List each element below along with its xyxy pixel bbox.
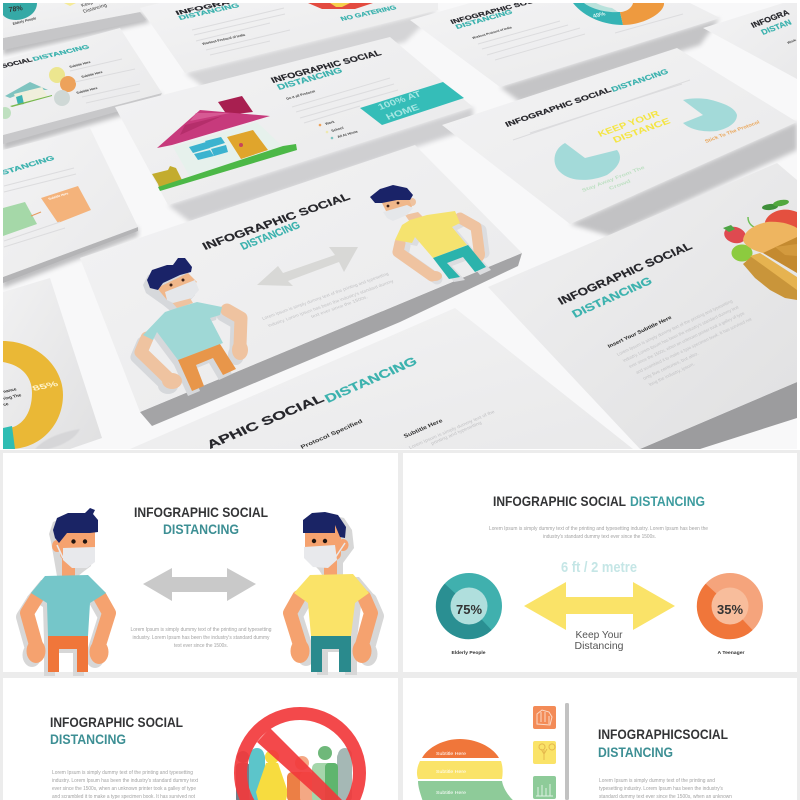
slide: protocol specified: Lorem Ipsum is simply dummy text of the: [408, 409, 496, 451]
title: INFOGRAPHIC SOCIAL: [493, 493, 626, 509]
slide: donut 49%: 49%: [592, 11, 608, 20]
layered bubble: Subtitle Here: [436, 769, 467, 774]
body text: [489, 526, 708, 540]
title: DISTANCING: [163, 521, 239, 537]
slide shadows: [3, 10, 797, 449]
slide: flow boxes: Subtitle Here: [48, 192, 69, 201]
slide: keep your distance: Stay Away From The: [581, 165, 646, 194]
slide: title with fruit basket: Lorem Ipsum is simply dummy text of the printing and typesetting: [616, 299, 734, 358]
slide: protocol specified: APHIC SOCIAL: [204, 392, 327, 451]
body text: and scrambled it to make a type specimen book. It has survived not: [52, 794, 196, 800]
distance label: 6 ft / 2 metre: [561, 559, 637, 576]
slide: house with 100% at home: INFOGRAPHIC SOCIAL: [269, 48, 383, 85]
slide: keep your distance: INFOGRAPHIC SOCIAL: [504, 85, 613, 129]
body text: Lorem Ipsum is simply dummy text of the printing and typesetting: [52, 770, 193, 776]
slide: title and no gathering: INFOGRA: [175, 0, 232, 17]
slide: house with 100% at home: DISTANCING: [275, 65, 344, 92]
donut labels: A Teenager: [718, 650, 745, 655]
keep your distance heading: KEEP YOUR: [596, 109, 661, 139]
body text: Lorem Ipsum is simply dummy text of the printing and: [599, 778, 715, 784]
title: [50, 718, 183, 744]
layered bubble: Subtitle Here: [436, 751, 467, 756]
body text: [52, 770, 199, 800]
donut 75%: 75%: [456, 602, 482, 617]
slide: top right corner: INFOGRA: [750, 8, 791, 30]
keep your distance heading: DISTANCE: [611, 116, 672, 145]
slide: two masked men: INFOGRAPHIC SOCIAL: [201, 191, 353, 252]
slide: donut 49%: INFOGRAPHIC SOC: [450, 0, 535, 26]
slide: keep your distance: Crowd: [608, 179, 632, 192]
bullets: [319, 120, 359, 139]
slide: flow boxes: [0, 128, 138, 277]
slide: small house with steps: [0, 28, 162, 135]
slide: two masked men: DISTANCING: [239, 220, 303, 252]
slide: title and no gathering: NO GATERING: [340, 5, 398, 23]
donut labels: [452, 650, 745, 655]
body text: ever since the 1500s, when an unknown printer took a galley of type: [52, 786, 196, 792]
slide: protocol specified: Subtitle Here: [403, 418, 445, 440]
slide: donut 85%: ce: [2, 401, 10, 407]
title: DISTANCING: [50, 731, 126, 747]
slide: top right corner: [703, 3, 797, 79]
slide: title with fruit basket: ever since the 1500s, when an unknown printer took a galley of type: [628, 311, 746, 370]
slide: top-left 78%: Keep: [80, 0, 95, 9]
slide: top-left 78%: 78%: [8, 5, 24, 14]
layered bubble: [417, 739, 515, 800]
keep your distance heading: [598, 111, 671, 143]
slide: title and no gathering: DISTANCING: [178, 3, 241, 22]
callout: 100% at home: [360, 82, 464, 125]
crowd: [236, 746, 352, 800]
title: INFOGRAPHIC SOCIAL: [134, 504, 268, 520]
slide: donut 49%: DISTANCING: [455, 9, 514, 31]
slide: protocol specified: [130, 308, 633, 451]
fruit basket illustration: [722, 199, 797, 300]
slide: title with fruit basket: long the industry, ipsum.: [648, 362, 696, 388]
slide: title with fruit basket: [488, 163, 797, 449]
slide: small house with steps: SOCIAL: [0, 57, 34, 70]
donut labels: Elderly People: [452, 650, 486, 655]
keep your distancing label: [574, 629, 624, 652]
slide: title and no gathering: Workout Protocol of India: [202, 33, 246, 46]
icon: hand tile: [533, 706, 556, 729]
perspective slide collage: [0, 0, 797, 451]
title: [598, 730, 728, 757]
double arrow: [143, 568, 256, 601]
body text: [130, 627, 272, 649]
body text: Lorem Ipsum is simply dummy text of the printing and typesetting industry. Lorem Ipsum has been the: [489, 526, 708, 532]
title: [134, 504, 268, 537]
slide: two masked men: Lorem Ipsum is simply dummy text of the printing and typesetting: [261, 271, 390, 321]
slide: top-left 78%: Elderly People: [12, 16, 37, 26]
slide: top right corner: DISTAN: [760, 18, 793, 37]
slide: keep your distance: [442, 48, 797, 224]
donut 35%: 35%: [717, 602, 743, 617]
lower panel backdrop: [0, 450, 800, 800]
slide: protocol specified: printing and typesetting: [430, 420, 483, 447]
title: DISTANCING: [630, 493, 705, 509]
callout: 100% at home: HOME: [384, 102, 421, 122]
slide: two masked men: text ever since the 1500s.: [310, 295, 368, 319]
slide: title with fruit basket: only five centuries, but also.: [642, 351, 700, 382]
body text: [599, 778, 732, 800]
body text: Lorem Ipsum is simply dummy text of the printing and typesetting: [130, 627, 272, 633]
slide: top-left 78%: [3, 3, 158, 38]
icon: chart tile: [533, 776, 556, 799]
man with teal shirt: [22, 508, 109, 676]
slide: small house with steps: Subtitle Here: [81, 70, 103, 79]
slide: house with 100% at home: [115, 37, 473, 205]
slide: protocol specified: DISTANCING: [322, 354, 420, 405]
slide: house with 100% at home: Do it all Protocol: [286, 90, 316, 101]
slide: top-left 78%: Distancing: [82, 3, 108, 15]
slide: small house with steps: Subtitle Here: [76, 86, 98, 95]
body text: industry. Lorem Ipsum has been the industry's standard dummy: [132, 635, 270, 641]
keep your distancing label: Keep Your: [576, 629, 623, 641]
keep your distancing label: Distancing: [574, 640, 624, 652]
body text: text ever since the 1500s.: [174, 643, 228, 649]
pie left: [555, 143, 620, 180]
slide: keep your distance: Stick To The Protocol: [704, 119, 762, 145]
body text: typesetting industry. Lorem Ipsum has been the industry's: [599, 786, 723, 792]
slide: flow boxes: STANCING: [0, 154, 57, 177]
slide: donut 85%: nance: [2, 387, 18, 394]
title: INFOGRAPHICSOCIAL: [598, 726, 728, 742]
pie right: [683, 98, 737, 131]
bullets: All At Home: [337, 130, 359, 139]
man with yellow shirt: [370, 185, 491, 282]
slide: donut 85%: [2, 278, 102, 449]
man with yellow shirt: [290, 512, 378, 675]
body text: standard dummy text ever since the 1500s, when an unknown: [599, 794, 732, 800]
donut 35%: [697, 573, 763, 639]
people crossed out: [236, 714, 360, 800]
slide: title with fruit basket: Insert Your Subtitle Here: [607, 315, 673, 350]
panel: speech bubble layers: [403, 678, 797, 800]
slide: small house with steps: Subtitle Here: [69, 60, 91, 69]
body text: industry's standard dummy text ever since the 1500s.: [543, 534, 656, 540]
bullets: School: [331, 126, 344, 133]
slide: keep your distance: DISTANCING: [610, 67, 670, 94]
double arrow: [257, 247, 358, 286]
slide: donut 85%: 85%: [31, 380, 60, 393]
vertical divider: [565, 703, 569, 800]
slide: title with fruit basket: INFOGRAPHIC SOCIAL: [556, 241, 695, 307]
callout: 100% at home: 100% AT: [376, 89, 423, 112]
slide: donut 85%: ring The: [2, 393, 23, 401]
slide: title with fruit basket: and scrambled it to make a type specimen book. It has survived not: [635, 316, 754, 376]
panel: two men with arrow: [3, 453, 398, 676]
title: DISTANCING: [598, 744, 673, 760]
double arrow: [524, 582, 675, 630]
panel: no gathering: [3, 678, 398, 800]
man with teal shirt: [137, 258, 248, 396]
slide: top right corner: Work: [787, 38, 797, 45]
slide: title with fruit basket: DISTANCING: [570, 275, 655, 320]
house illustration: [152, 96, 297, 191]
icon: people tile: [533, 741, 556, 764]
donut 75%: [436, 573, 502, 639]
slide: protocol specified: Protocol Specified: [300, 419, 365, 451]
slide: donut 49%: [410, 0, 720, 87]
slide: small house with steps: DISTANCING: [31, 44, 91, 63]
slide: title with fruit basket: industry. Lorem Ipsum has been the industry's standard dummy text: [622, 304, 741, 364]
slide: donut 49%: Workout Protocol of India: [472, 26, 513, 40]
panel: keep your distancing: [403, 453, 797, 672]
slide: title and no gathering: [140, 0, 438, 73]
title: INFOGRAPHIC SOCIAL: [50, 714, 183, 730]
slide: two masked men: [80, 145, 522, 412]
bullets: Work: [325, 120, 336, 126]
body text: industry. Lorem Ipsum has been the industry's standard dummy text: [52, 778, 199, 784]
slide: two masked men: industry. Lorem Ipsum has been the industry's standard dummy: [267, 278, 395, 328]
prohibition sign: [240, 714, 360, 800]
layered bubble: Subtitle Here: [436, 790, 467, 795]
